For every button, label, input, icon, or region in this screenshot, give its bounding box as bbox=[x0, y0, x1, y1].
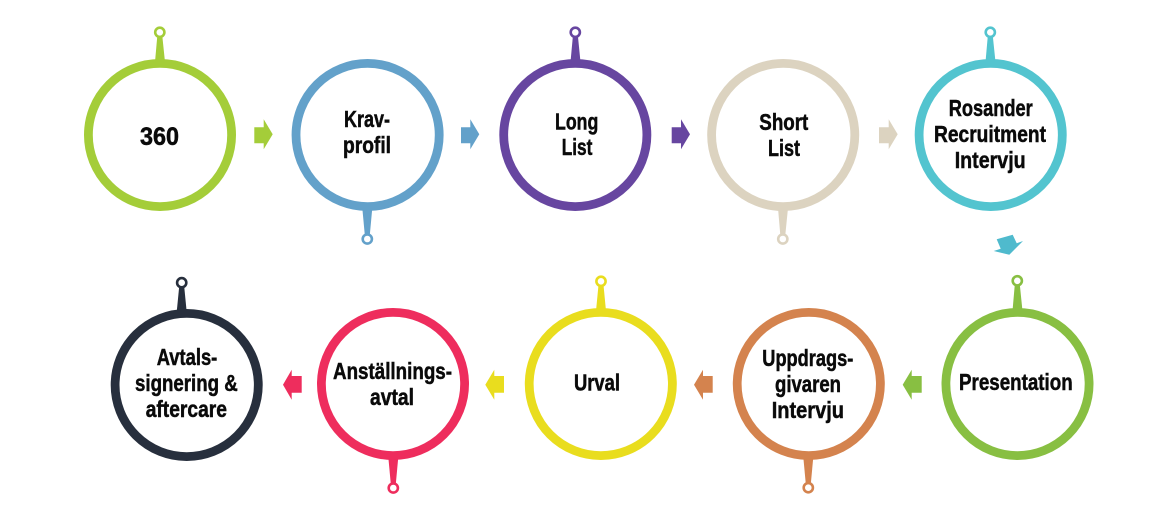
pin: step 1 bbox=[155, 28, 165, 62]
label: Long List: Long bbox=[555, 108, 598, 134]
label: Anställningsavtal bbox=[333, 358, 452, 410]
label: Long List bbox=[555, 108, 598, 160]
label: Short List: List bbox=[768, 135, 800, 161]
pin: step 10 bbox=[177, 278, 187, 312]
pin: step 9 bbox=[388, 457, 398, 493]
label: Rosander Recruitment Intervju: Intervju bbox=[955, 147, 1026, 173]
arrow: step 9 to 10 bbox=[283, 370, 302, 400]
step 4: Short List bbox=[712, 63, 855, 244]
arrow: step 4 to 5 bbox=[879, 119, 898, 149]
circle: step 6 bbox=[946, 312, 1089, 456]
pin: step 2 bbox=[362, 208, 372, 244]
step 7: Uppdragsgivaren Intervju bbox=[737, 312, 880, 492]
label: Krav-profil bbox=[343, 106, 391, 158]
circle: step 5 bbox=[919, 63, 1062, 207]
label: Krav-profil: Krav- bbox=[344, 106, 390, 132]
arrow: step 1 to 2 bbox=[254, 119, 273, 149]
label: Rosander Recruitment Intervju: Rosander bbox=[949, 95, 1033, 121]
pin: step 4 bbox=[778, 208, 788, 244]
label: 360: 360 bbox=[140, 123, 179, 151]
step 3: Long List bbox=[504, 28, 647, 207]
circle: step 7 bbox=[737, 312, 880, 456]
label: Avtalssignering & aftercare: Avtals- bbox=[157, 344, 217, 370]
label: Urval: Urval bbox=[574, 370, 620, 396]
step 10: Avtalssignering & aftercare bbox=[115, 278, 258, 457]
label: Long List: List bbox=[562, 134, 593, 160]
label: Avtalssignering & aftercare bbox=[135, 344, 238, 422]
label: Uppdragsgivaren Intervju: Intervju bbox=[772, 397, 844, 423]
label: Rosander Recruitment Intervju: Recruitment bbox=[934, 121, 1046, 147]
label: Anställningsavtal: avtal bbox=[370, 384, 414, 410]
label: Avtalssignering & aftercare: aftercare bbox=[146, 396, 227, 422]
step 2: Krav-profil bbox=[296, 63, 439, 244]
circle: step 2 bbox=[296, 63, 439, 207]
circle: step 10 bbox=[115, 313, 258, 457]
circle: step 3 bbox=[504, 63, 647, 207]
arrow: step 3 to 4 bbox=[672, 119, 690, 149]
label: Presentation: Presentation bbox=[959, 369, 1073, 395]
label: Uppdragsgivaren Intervju: Uppdrags- bbox=[762, 345, 853, 371]
arrow: step 5 to 6 bbox=[994, 235, 1023, 255]
arrow: step 6 to 7 bbox=[903, 370, 922, 400]
label: Uppdragsgivaren Intervju bbox=[762, 345, 853, 423]
label: Avtalssignering & aftercare: signering & bbox=[135, 370, 238, 396]
circle: step 8 bbox=[529, 312, 672, 456]
arrow: step 7 to 8 bbox=[694, 370, 713, 400]
circle: step 1 bbox=[88, 63, 232, 207]
pin: step 7 bbox=[803, 457, 813, 492]
label: Short List bbox=[759, 109, 809, 161]
pin: step 6 bbox=[1012, 276, 1022, 311]
label: Short List: Short bbox=[759, 109, 809, 135]
step 1: 360 bbox=[88, 28, 232, 207]
pin: step 3 bbox=[570, 28, 580, 62]
circle: step 9 bbox=[321, 312, 465, 456]
step 8: Urval bbox=[529, 277, 672, 456]
step 9: Anställningsavtal bbox=[321, 312, 465, 493]
arrow: step 2 to 3 bbox=[461, 119, 479, 149]
arrow: step 8 to 9 bbox=[485, 370, 504, 400]
step 5: Rosander Recruitment Intervju bbox=[919, 28, 1062, 207]
pin: step 8 bbox=[596, 277, 606, 311]
pin: step 5 bbox=[986, 28, 996, 62]
step 6: Presentation bbox=[946, 276, 1089, 456]
label: Krav-profil: profil bbox=[343, 132, 391, 158]
label: Uppdragsgivaren Intervju: givaren bbox=[775, 371, 841, 397]
circle: step 4 bbox=[712, 63, 855, 207]
label: Anställningsavtal: Anställnings- bbox=[333, 358, 452, 384]
label: Rosander Recruitment Intervju bbox=[934, 95, 1046, 173]
